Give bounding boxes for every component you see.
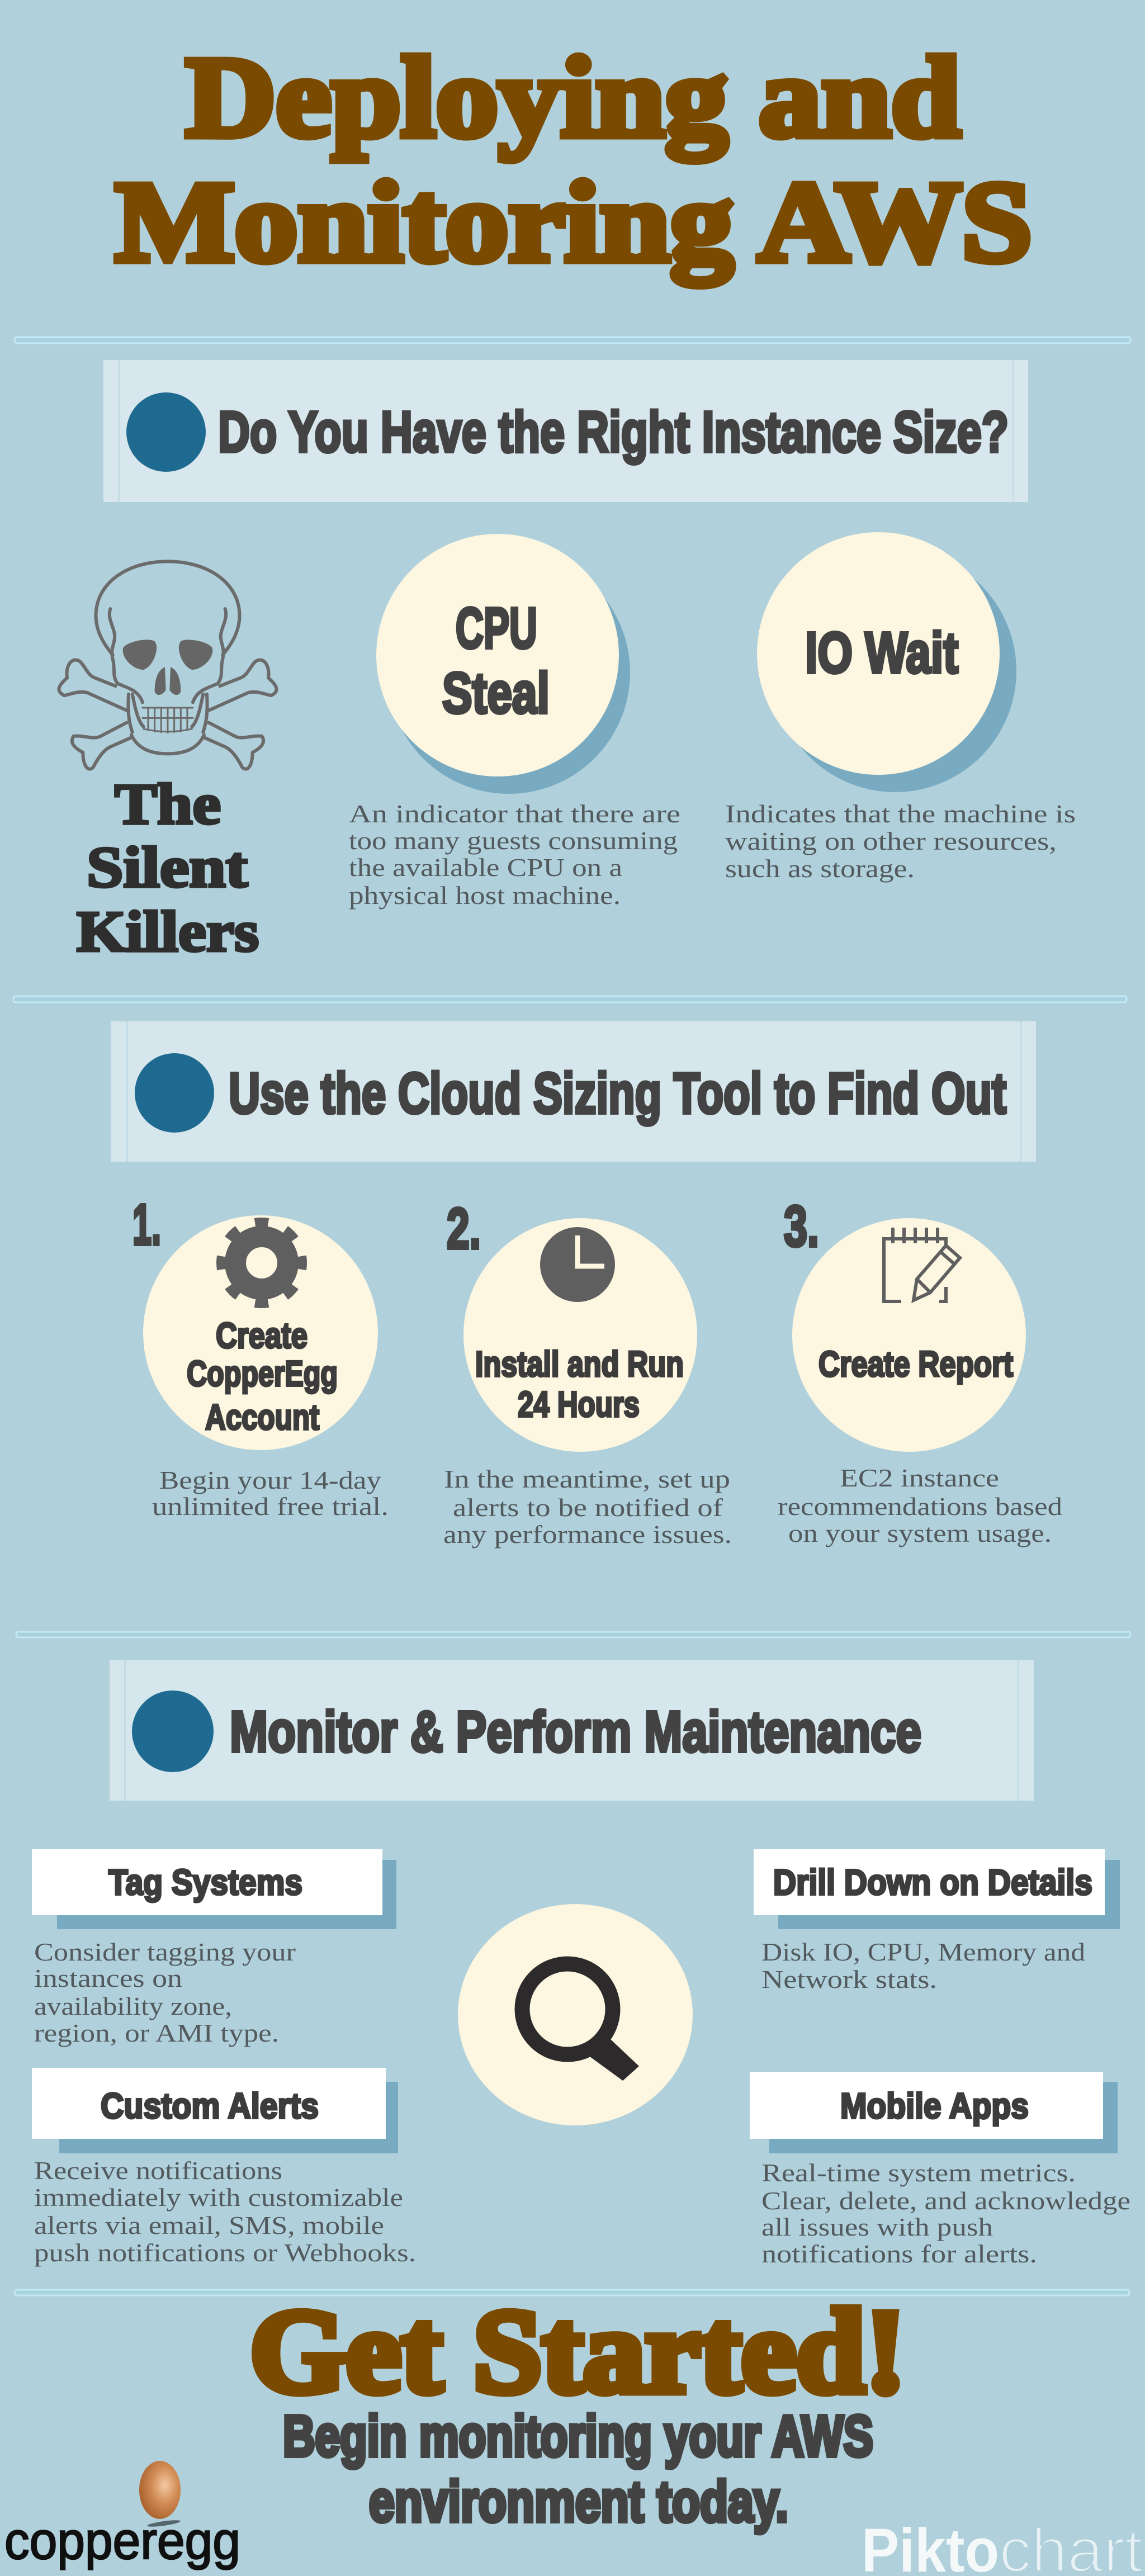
- text: tag systems description: availability zone,: [34, 1992, 232, 2020]
- text: mobile apps description: notifications for alerts.: [761, 2239, 1037, 2268]
- icon: magnifying glass: [458, 1904, 693, 2125]
- text: step 3 description: [778, 1464, 1062, 1547]
- heading: get started: Get Started!: [250, 2285, 906, 2418]
- icon: notepad and pencil: [884, 1228, 960, 1301]
- text: IO wait description: Indicates that the machine is: [725, 799, 1076, 828]
- number 3: 3.: [784, 1194, 819, 1258]
- text: IO wait description: such as storage.: [725, 854, 915, 883]
- text: mobile apps description: all issues with push: [761, 2213, 993, 2241]
- text: step 2 description: alerts to be notified of: [453, 1493, 723, 1522]
- icon: gear: [221, 1222, 302, 1304]
- step 2: [443, 1196, 732, 1549]
- text: CPU steal description: the available CPU on a: [349, 853, 622, 882]
- text: call to action: Begin monitoring your AWS: [283, 2404, 873, 2468]
- text: step 3 description: recommendations based: [778, 1492, 1062, 1521]
- number 1: 1.: [133, 1192, 161, 1257]
- text: step 1 description: unlimited free trial.: [152, 1492, 389, 1521]
- text: tag systems description: instances on: [34, 1964, 182, 1992]
- label: CPU Steal: CPU: [456, 596, 537, 660]
- text: CPU steal description: [349, 799, 680, 910]
- label: create copperegg account: Account: [205, 1397, 319, 1437]
- text: custom alerts description: [34, 2156, 416, 2267]
- label: drill down on details: Drill Down on Details: [773, 1862, 1092, 1902]
- title: Deploying and: [186, 33, 961, 161]
- number 2: 2.: [447, 1196, 481, 1261]
- label: create copperegg account: [187, 1315, 338, 1437]
- logo: copperegg: [4, 2461, 240, 2570]
- label: install and run: 24 Hours: [518, 1384, 640, 1424]
- text: IO wait description: [725, 799, 1076, 883]
- step 3: [778, 1194, 1062, 1547]
- icon: heading dot: [126, 392, 206, 472]
- text: step 3 description: on your system usage.: [788, 1519, 1052, 1547]
- text: step 2 description: In the meantime, set up: [444, 1465, 730, 1493]
- title: [115, 33, 1032, 286]
- text: drill down description: Disk IO, CPU, Memory and: [761, 1938, 1085, 1966]
- heading: the silent killers: Silent: [87, 835, 248, 899]
- panel: drill down on details: [754, 1849, 1120, 1993]
- title: Monitoring AWS: [115, 158, 1032, 286]
- text: call to action: environment today.: [369, 2469, 788, 2534]
- logo: piktochart: [862, 2516, 1143, 2576]
- text: drill down description: [761, 1938, 1085, 1993]
- text: CPU steal description: too many guests consuming: [349, 826, 678, 855]
- wordmark: copperegg: copperegg: [4, 2511, 240, 2570]
- text: tag systems description: [34, 1938, 296, 2047]
- label: install and run: [475, 1344, 684, 1424]
- label: CPU Steal: Steal: [442, 661, 550, 725]
- text: mobile apps description: Clear, delete, and acknowledge: [761, 2186, 1130, 2215]
- heading: the silent killers: The: [115, 772, 221, 836]
- label: mobile apps: Mobile Apps: [840, 2086, 1029, 2126]
- panel: IO wait: [725, 532, 1076, 883]
- panel: tag systems: [32, 1849, 396, 2047]
- panel: CPU steal: [349, 534, 680, 910]
- text: custom alerts description: immediately with customizable: [34, 2183, 403, 2212]
- label: install and run: Install and Run: [475, 1344, 684, 1384]
- panel: monitor heading: [110, 1660, 1034, 1801]
- label: CPU Steal: [442, 596, 550, 725]
- panel: mobile apps: [750, 2072, 1130, 2268]
- text: step 1 description: Begin your 14-day: [159, 1466, 381, 1494]
- text: step 3 description: EC2 instance: [840, 1464, 999, 1492]
- text: mobile apps description: Real-time system metrics.: [761, 2158, 1076, 2187]
- label: IO Wait: IO Wait: [805, 621, 958, 685]
- panel: custom alerts: [32, 2068, 416, 2267]
- label: custom alerts: Custom Alerts: [101, 2086, 319, 2126]
- icon: clock: [540, 1227, 615, 1302]
- label: tag systems: Tag Systems: [108, 1862, 302, 1902]
- text: custom alerts description: alerts via email, SMS, mobile: [34, 2211, 384, 2239]
- text: tag systems description: region, or AMI type.: [34, 2019, 279, 2047]
- label: create copperegg account: CopperEgg: [187, 1353, 338, 1394]
- icon: heading dot: [132, 1690, 214, 1772]
- panel: cloud sizing tool heading: [111, 1021, 1036, 1162]
- step 1: [133, 1192, 389, 1521]
- panel: right instance size heading: [103, 360, 1028, 502]
- text: step 1 description: [152, 1466, 389, 1521]
- text: drill down description: Network stats.: [761, 1965, 937, 1993]
- text: custom alerts description: push notifications or Webhooks.: [34, 2238, 416, 2267]
- text: call to action: [283, 2404, 873, 2534]
- text: step 2 description: any performance issues.: [443, 1520, 732, 1549]
- icon: heading dot: [135, 1053, 214, 1133]
- text: step 2 description: [443, 1465, 732, 1549]
- icon: egg: [139, 2461, 181, 2528]
- label: create report: Create Report: [818, 1344, 1013, 1384]
- text: tag systems description: Consider tagging your: [34, 1938, 296, 1966]
- heading: the silent killers: Killers: [77, 899, 259, 964]
- heading: monitor and perform maintenance: Monitor & Perform Maintenance: [230, 1699, 921, 1764]
- icon: skull and crossbones: [59, 561, 277, 769]
- text: mobile apps description: [761, 2158, 1130, 2268]
- heading: the silent killers: [77, 772, 259, 964]
- text: IO wait description: waiting on other resources,: [725, 827, 1057, 855]
- text: custom alerts description: Receive notifications: [34, 2156, 282, 2185]
- label: create copperegg account: Create: [216, 1315, 307, 1356]
- text: CPU steal description: physical host machine.: [349, 881, 621, 910]
- text: CPU steal description: An indicator that there are: [349, 799, 680, 828]
